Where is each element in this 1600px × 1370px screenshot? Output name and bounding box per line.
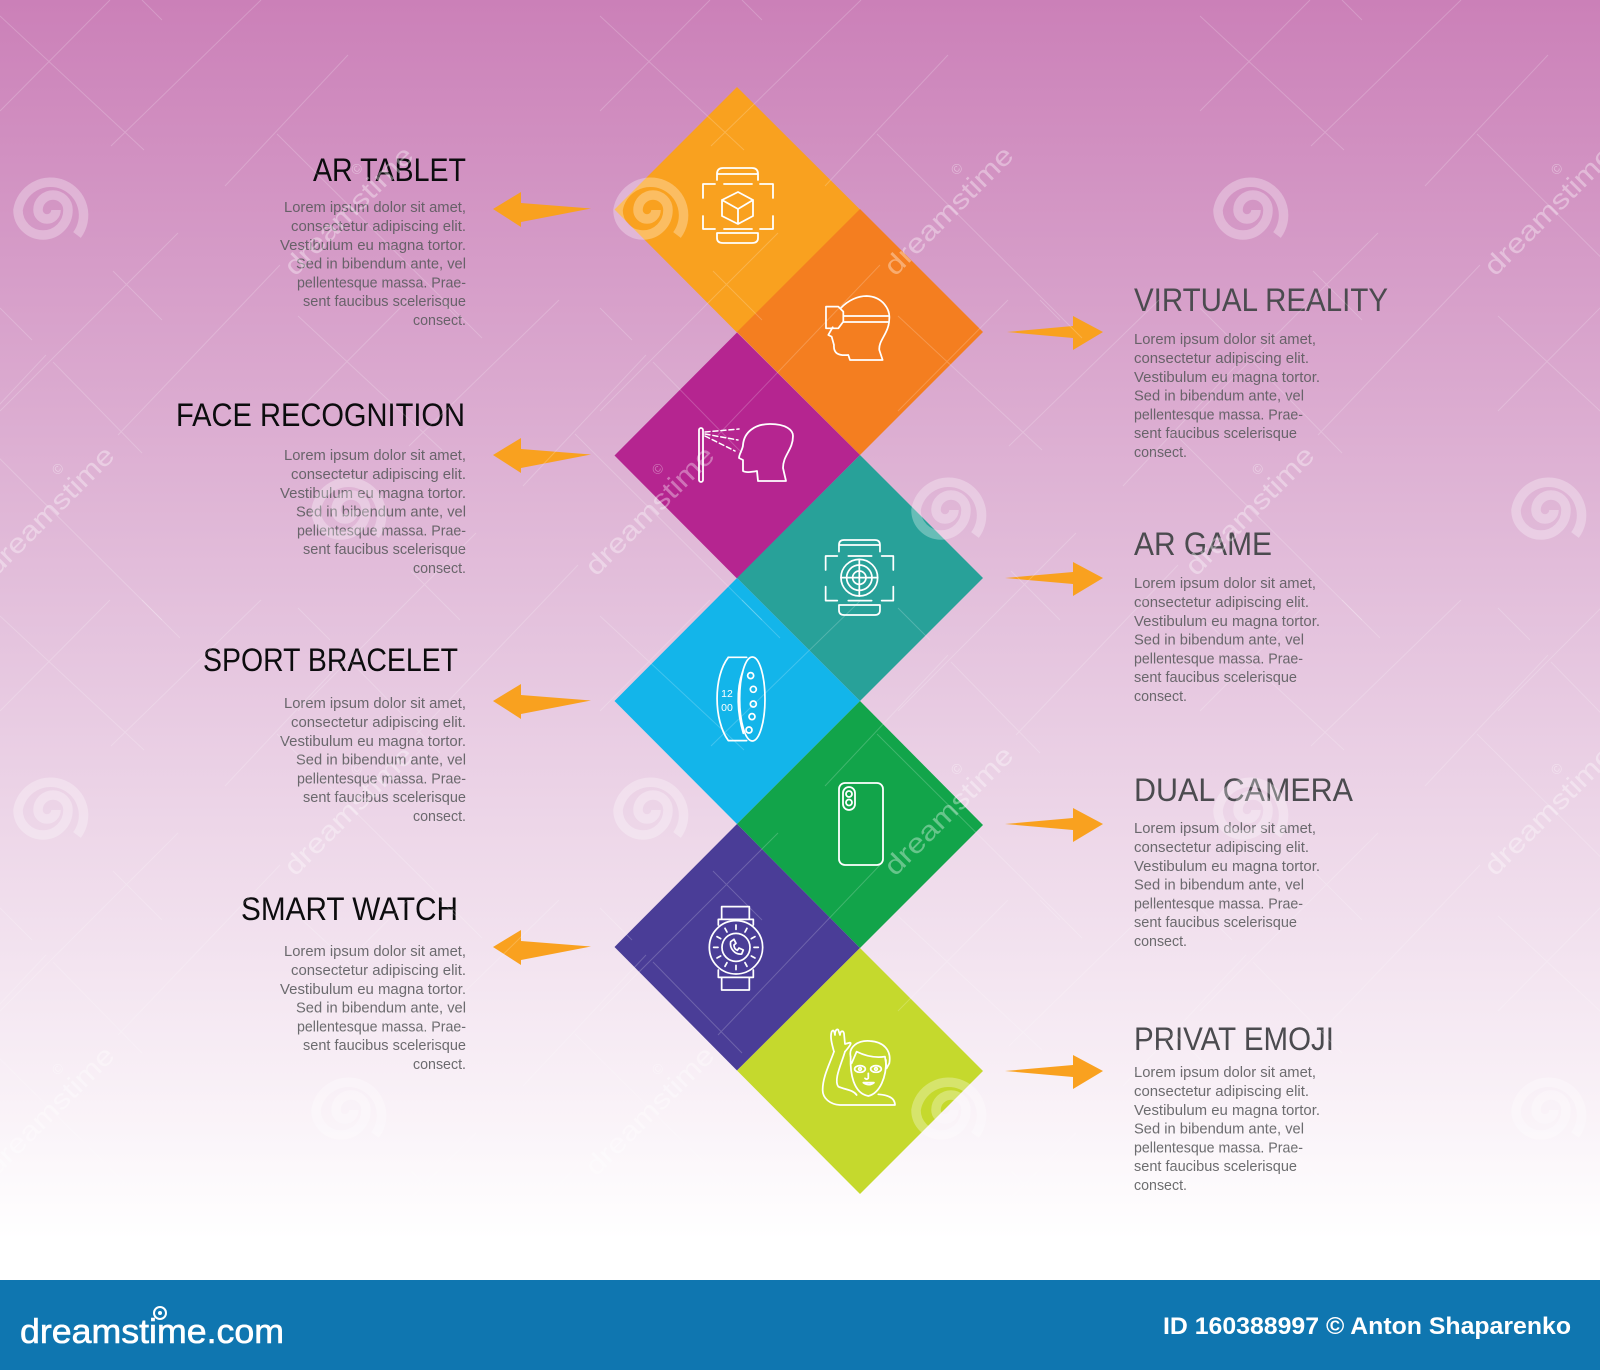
left text: FACE RECOGNITION description: Lorem ipsum dolor sit amet, <box>284 447 466 464</box>
icon: smart watch <box>709 907 763 990</box>
watermark overlay: diagonal lines, spirals and wordmarks: © <box>648 459 667 478</box>
diamond: AR game <box>737 455 983 701</box>
icon: VR headset on head <box>826 296 889 360</box>
right text: DUAL CAMERA description: consect. <box>1134 933 1187 950</box>
left text: FACE RECOGNITION description <box>280 447 466 577</box>
watermark overlay: diagonal lines, spirals and wordmarks: © <box>648 1059 667 1078</box>
watermark overlay: diagonal lines, spirals and wordmarks: © <box>347 159 366 178</box>
arrow: sport bracelet <box>493 684 591 719</box>
arrow: privat emoji <box>1005 1055 1103 1089</box>
left text: SMART WATCH description: Lorem ipsum dolor sit amet, <box>284 943 466 960</box>
right text: PRIVAT EMOJI description: consectetur adipiscing elit. <box>1134 1083 1309 1100</box>
right text: PRIVAT EMOJI description: pellentesque massa. Prae- <box>1134 1140 1303 1156</box>
right text: PRIVAT EMOJI description: Sed in bibendum ante, vel <box>1134 1120 1304 1138</box>
arrow: smart watch <box>493 930 591 965</box>
right text: PRIVAT EMOJI description: sent faucibus scelerisque <box>1134 1158 1297 1175</box>
watermark overlay: diagonal lines, spirals and wordmarks: dreamstime <box>579 440 720 581</box>
left text: SMART WATCH description: sent faucibus scelerisque <box>303 1037 466 1054</box>
right text: VIRTUAL REALITY description: consect. <box>1134 444 1187 461</box>
right text: VIRTUAL REALITY description <box>1134 331 1320 461</box>
left text: SMART WATCH description: Vestibulum eu magna tortor. <box>280 981 466 998</box>
watermark overlay: diagonal lines, spirals and wordmarks: dreamstime <box>278 740 419 881</box>
watermark overlay: diagonal lines, spirals and wordmarks: dreamstime <box>1179 440 1320 581</box>
watermark overlay: diagonal lines, spirals and wordmarks: © <box>48 459 67 478</box>
right text: PRIVAT EMOJI description: Vestibulum eu magna tortor. <box>1134 1102 1320 1119</box>
right text: DUAL CAMERA description <box>1134 820 1320 950</box>
left text: FACE RECOGNITION description: Vestibulum eu magna tortor. <box>280 485 466 502</box>
left text: SMART WATCH description: pellentesque massa. Prae- <box>297 1018 466 1036</box>
watermark overlay: diagonal lines, spirals and wordmarks: dreamstime <box>878 740 1019 881</box>
right heading: AR GAME: AR GAME <box>1134 526 1272 562</box>
left text: AR TABLET description: Lorem ipsum dolor sit amet, <box>284 199 466 216</box>
diamond: smart watch <box>614 824 860 1070</box>
watermark overlay: diagonal lines, spirals and wordmarks: dreamstime <box>1478 740 1600 881</box>
footer logo: dreamstime.com: dreamstime.com <box>20 1313 284 1351</box>
left text: AR TABLET description: Sed in bibendum ante, vel <box>296 256 466 272</box>
icon: sport bracelet <box>717 657 765 741</box>
left heading: SPORT BRACELET: SPORT BRACELET <box>203 642 458 678</box>
left text: FACE RECOGNITION description: sent faucibus scelerisque <box>303 541 466 558</box>
left text: SPORT BRACELET description: Lorem ipsum dolor sit amet, <box>284 695 466 712</box>
left text: SPORT BRACELET description: consect. <box>413 808 466 825</box>
icon: dual camera phone <box>839 783 883 865</box>
right text: AR GAME description: Sed in bibendum ante, vel <box>1134 632 1304 648</box>
left heading: SMART WATCH: SMART WATCH <box>241 891 458 927</box>
right text: AR GAME description <box>1134 575 1320 705</box>
left text: FACE RECOGNITION description: pellentesque massa. Prae- <box>297 522 466 540</box>
left text: SPORT BRACELET description: Vestibulum eu magna tortor. <box>280 733 466 750</box>
right text: AR GAME description: consectetur adipiscing elit. <box>1134 594 1309 611</box>
right text: VIRTUAL REALITY description: Lorem ipsum dolor sit amet, <box>1134 331 1316 348</box>
arrow: virtual reality <box>1007 316 1103 350</box>
left text: SMART WATCH description: consectetur adipiscing elit. <box>291 962 466 979</box>
arrow: AR game <box>1005 562 1103 596</box>
diamond: AR tablet <box>614 87 860 332</box>
right text: VIRTUAL REALITY description: consectetur adipiscing elit. <box>1134 350 1309 367</box>
watermark overlay: diagonal lines, spirals and wordmarks: dreamstime <box>1478 140 1600 281</box>
left text: SPORT BRACELET description: pellentesque massa. Prae- <box>297 770 466 788</box>
watermark overlay: diagonal lines, spirals and wordmarks: © <box>347 759 366 778</box>
right text: VIRTUAL REALITY description: sent faucibus scelerisque <box>1134 425 1297 442</box>
right text: AR GAME description: Vestibulum eu magna tortor. <box>1134 613 1320 630</box>
diamond: dual camera <box>737 701 983 948</box>
arrow: face recognition <box>493 438 591 473</box>
icon: AR game target <box>826 540 893 615</box>
left text: AR TABLET description <box>280 199 466 329</box>
left text: SMART WATCH description: consect. <box>413 1056 466 1073</box>
watermark overlay: diagonal lines, spirals and wordmarks: dreamstime <box>278 140 419 281</box>
diamond: virtual reality <box>737 209 983 455</box>
watermark overlay: diagonal lines, spirals and wordmarks: dreamstime <box>878 140 1019 281</box>
arrow: dual camera <box>1005 808 1103 842</box>
watermark overlay: diagonal lines, spirals and wordmarks: © <box>1248 459 1267 478</box>
right text: PRIVAT EMOJI description: consect. <box>1134 1177 1187 1194</box>
right text: VIRTUAL REALITY description: Sed in bibendum ante, vel <box>1134 388 1304 404</box>
right text: AR GAME description: Lorem ipsum dolor sit amet, <box>1134 575 1316 592</box>
left text: SPORT BRACELET description: Sed in bibendum ante, vel <box>296 752 466 768</box>
watermark overlay: diagonal lines, spirals and wordmarks: © <box>1547 759 1566 778</box>
diamond: privat emoji <box>737 948 983 1194</box>
footer bar <box>0 1280 1600 1370</box>
diamond: face recognition <box>614 332 860 578</box>
right text: PRIVAT EMOJI description <box>1134 1064 1320 1194</box>
left text: SPORT BRACELET description: consectetur adipiscing elit. <box>291 714 466 731</box>
arrow: AR tablet <box>493 192 591 227</box>
icon: privat emoji <box>823 1029 895 1105</box>
watermark overlay: diagonal lines, spirals and wordmarks: © <box>947 159 966 178</box>
left text: AR TABLET description: consectetur adipiscing elit. <box>291 218 466 235</box>
left heading: AR TABLET: AR TABLET <box>313 152 466 188</box>
left text: FACE RECOGNITION description: consect. <box>413 560 466 577</box>
right heading: DUAL CAMERA: DUAL CAMERA <box>1134 772 1354 808</box>
right heading: VIRTUAL REALITY: VIRTUAL REALITY <box>1134 282 1388 318</box>
right text: DUAL CAMERA description: Lorem ipsum dolor sit amet, <box>1134 820 1316 837</box>
left heading: FACE RECOGNITION: FACE RECOGNITION <box>176 397 465 433</box>
right text: VIRTUAL REALITY description: pellentesque massa. Prae- <box>1134 406 1303 424</box>
left text: FACE RECOGNITION description: consectetur adipiscing elit. <box>291 466 466 483</box>
watermark overlay: diagonal lines, spirals and wordmarks: © <box>48 1059 67 1078</box>
left text: SPORT BRACELET description <box>280 695 466 825</box>
right text: AR GAME description: consect. <box>1134 688 1187 705</box>
left text: AR TABLET description: Vestibulum eu magna tortor. <box>280 237 466 254</box>
left text: AR TABLET description: consect. <box>413 312 466 329</box>
left text: SPORT BRACELET description: sent faucibus scelerisque <box>303 789 466 806</box>
left text: SMART WATCH description <box>280 943 466 1073</box>
right heading: PRIVAT EMOJI: PRIVAT EMOJI <box>1134 1021 1334 1057</box>
icon: sport bracelet: 00 <box>721 702 733 714</box>
right text: DUAL CAMERA description: pellentesque massa. Prae- <box>1134 896 1303 912</box>
left text: SMART WATCH description: Sed in bibendum ante, vel <box>296 1000 466 1016</box>
left text: AR TABLET description: sent faucibus scelerisque <box>303 293 466 310</box>
icon: face recognition <box>699 424 793 482</box>
right text: AR GAME description: sent faucibus scelerisque <box>1134 669 1297 686</box>
right text: DUAL CAMERA description: Sed in bibendum ante, vel <box>1134 876 1304 894</box>
right text: DUAL CAMERA description: Vestibulum eu magna tortor. <box>1134 858 1320 875</box>
left text: FACE RECOGNITION description: Sed in bibendum ante, vel <box>296 504 466 520</box>
icon: AR tablet <box>703 168 773 243</box>
footer credit: ID 160388997 © Anton Shaparenko <box>1163 1313 1571 1340</box>
watermark overlay: diagonal lines, spirals and wordmarks: dreamstime <box>579 1040 720 1181</box>
right text: PRIVAT EMOJI description: Lorem ipsum dolor sit amet, <box>1134 1064 1316 1081</box>
watermark overlay: diagonal lines, spirals and wordmarks: © <box>947 759 966 778</box>
icon: sport bracelet: 12 <box>721 688 733 700</box>
right text: DUAL CAMERA description: sent faucibus scelerisque <box>1134 914 1297 931</box>
right text: AR GAME description: pellentesque massa. Prae- <box>1134 650 1303 668</box>
watermark overlay: diagonal lines, spirals and wordmarks: © <box>1547 159 1566 178</box>
right text: DUAL CAMERA description: consectetur adipiscing elit. <box>1134 839 1309 856</box>
left text: AR TABLET description: pellentesque massa. Prae- <box>297 274 466 292</box>
diamond: sport bracelet <box>614 578 860 824</box>
right text: VIRTUAL REALITY description: Vestibulum eu magna tortor. <box>1134 369 1320 386</box>
